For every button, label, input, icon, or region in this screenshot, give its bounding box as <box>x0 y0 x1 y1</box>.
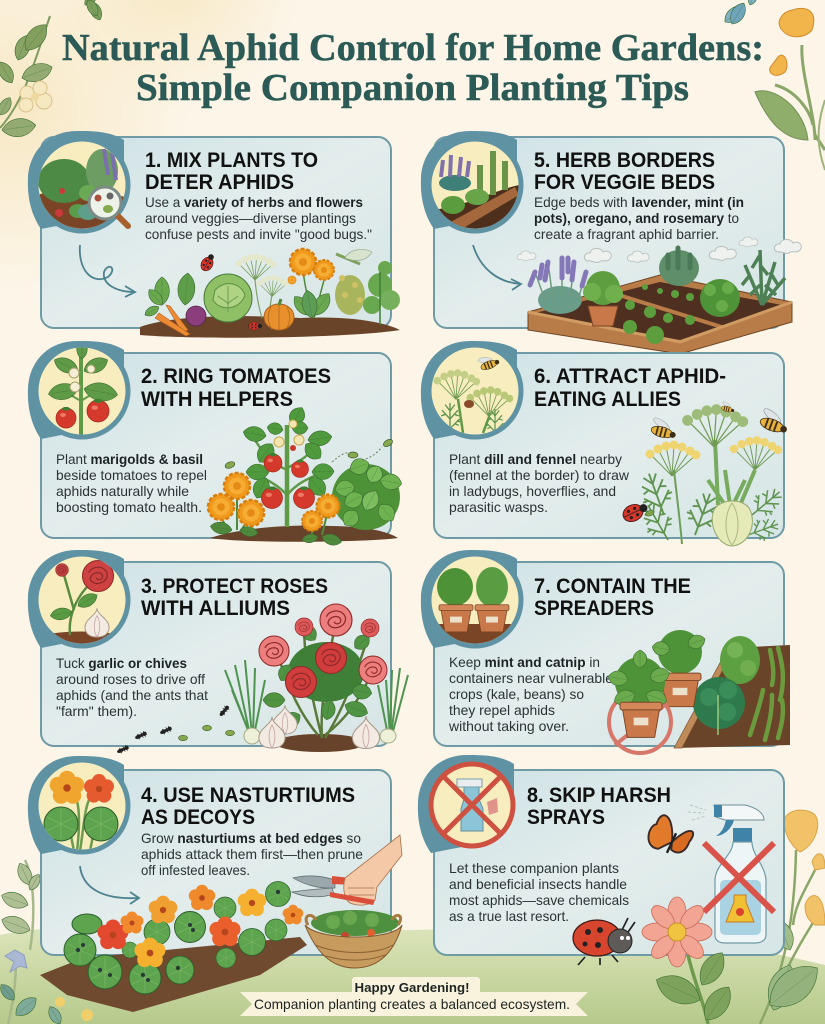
panel 2 badge icon: tomato plant <box>28 339 128 439</box>
aphid clusters <box>76 890 280 982</box>
umbel flower <box>235 253 289 318</box>
panel 8 heading <box>527 784 671 829</box>
panel 2 heading: 2. RING TOMATOES <box>141 365 331 388</box>
ladybug large <box>573 918 635 965</box>
raised bed scene <box>517 237 801 354</box>
panel 6 text: Plant dill and fennel nearby <box>449 451 622 467</box>
panel 5 card <box>434 137 784 328</box>
panel 3 card <box>41 562 391 746</box>
title: Simple Companion Planting Tips <box>136 67 689 109</box>
panel 8 card <box>434 770 784 955</box>
pink flower <box>642 897 738 1024</box>
pumpkin <box>264 299 294 330</box>
ladybug in scene 1 <box>199 252 217 273</box>
panel 3 badge icon: rose and garlic <box>28 550 128 650</box>
panel 6 text <box>449 451 630 515</box>
panel 1 heading: 1. MIX PLANTS TO <box>145 149 318 172</box>
panel 3 text: "farm" them). <box>56 703 137 719</box>
panel 2 text <box>56 451 207 515</box>
aphid leaf <box>644 509 655 517</box>
panel 1 card <box>41 137 391 328</box>
panel 1: mix plants <box>28 131 400 338</box>
rose bush <box>259 604 387 752</box>
nasturtium flowers <box>97 885 303 967</box>
footer banner <box>240 977 588 1016</box>
pot 2 with plant <box>651 630 707 707</box>
panel 7 text: they repel aphids <box>449 702 555 718</box>
panel 7 heading: 7. CONTAIN THE <box>534 575 691 598</box>
panel 7: contain spreaders <box>421 550 790 753</box>
panel 3 text <box>56 655 208 719</box>
panel 7 text: crops (kale, beans) so <box>449 686 584 702</box>
top-right foliage with orange flowers <box>721 0 825 170</box>
ring slash <box>615 705 665 745</box>
umbels <box>646 404 782 476</box>
panel 6 badge icon: dill with bees <box>421 341 521 439</box>
panel 3 heading: WITH ALLIUMS <box>141 597 290 620</box>
panel 1 text: confuse pests and invite "good bugs." <box>145 226 372 242</box>
panel 1 text: Use a variety of herbs and flowers <box>145 194 363 210</box>
panel 8: skip sprays <box>418 755 784 1024</box>
panel 8 text: Let these companion plants <box>449 860 619 876</box>
panel 5 heading: 5. HERB BORDERS <box>534 149 715 172</box>
marigolds <box>208 473 343 547</box>
lettuce <box>720 636 760 684</box>
thyme <box>659 248 699 286</box>
panel 3: roses <box>28 550 408 755</box>
panel 7 heading: SPREADERS <box>534 597 654 620</box>
panel 4 text: aphids attack them first—then prune <box>141 846 363 862</box>
dill fronds <box>634 468 788 547</box>
panel 4 heading: AS DECOYS <box>141 806 255 829</box>
spray bottle with red cross <box>688 805 774 943</box>
panel 4 text <box>141 830 363 878</box>
dill and fennel scene <box>620 400 792 547</box>
panel 5 text: pots), oregano, and rosemary to <box>534 210 739 226</box>
panel 6 text: in ladybugs, hoverflies, and <box>449 483 616 499</box>
panel 7 card <box>434 562 784 746</box>
panel 5: herb borders <box>421 131 801 354</box>
carrots and radish <box>143 272 206 336</box>
panel 4 heading <box>141 784 355 829</box>
panel 3 heading: 3. PROTECT ROSES <box>141 575 328 598</box>
panel 1 text: around veggies—diverse plantings <box>145 210 356 226</box>
chives left <box>225 660 265 744</box>
panel 3 text: aphids (and the ants that <box>56 687 208 703</box>
panel 1 badge icon: garden with magnifier <box>28 131 128 235</box>
panel 4 badge icon: nasturtiums <box>28 756 128 854</box>
rose scene <box>116 604 408 755</box>
panel 2 text: boosting tomato health. <box>56 499 202 515</box>
panel 4: nasturtiums <box>28 756 402 1012</box>
marigolds <box>288 249 335 319</box>
garden scene: mixed plants <box>140 249 400 338</box>
fennel bulb and stems <box>708 440 755 546</box>
garlic bulbs <box>259 705 380 748</box>
panel 2 heading: WITH HELPERS <box>141 388 293 411</box>
panel 6 text: parasitic wasps. <box>449 499 548 515</box>
panel 2 heading <box>141 365 331 411</box>
lavender <box>530 258 586 314</box>
panel 3 heading <box>141 575 328 620</box>
arrow: panel 1 <box>80 245 135 297</box>
panel 2 text: beside tomatoes to repel <box>56 467 207 483</box>
panel 2: tomatoes <box>28 339 403 547</box>
kale <box>693 677 745 735</box>
panel 5 heading: FOR VEGGIE BEDS <box>534 171 715 194</box>
lacewing <box>336 250 372 264</box>
title <box>62 27 764 109</box>
arrow: panel 4 <box>80 866 139 904</box>
panel 6 heading: 6. ATTRACT APHID- <box>534 365 726 388</box>
oregano <box>700 279 740 317</box>
arrow: panel 5 <box>473 245 521 290</box>
scent clouds <box>517 237 801 263</box>
ladybug <box>620 499 650 525</box>
top-left foliage <box>0 0 105 139</box>
pot 1 with plant <box>607 650 671 737</box>
panel 8 heading: SPRAYS <box>527 806 605 829</box>
crop bed <box>674 645 790 748</box>
panel 5 text <box>534 194 744 242</box>
basil <box>332 456 403 530</box>
hand with pruners <box>292 835 402 905</box>
panel 3 text: around roses to drive off <box>56 671 205 687</box>
soil <box>210 526 398 542</box>
bean pods <box>750 648 783 740</box>
panel 8 badge icon: no sprays <box>418 755 514 853</box>
panel 4 heading: 4. USE NASTURTIUMS <box>141 784 355 807</box>
tomato plant <box>242 404 334 527</box>
panel 5 heading <box>534 149 715 194</box>
panel 5 badge icon: herbs in bed <box>421 131 521 231</box>
raised bed <box>528 275 792 354</box>
panel 4 text: off infested leaves. <box>141 862 250 878</box>
panel 1 heading <box>145 149 318 194</box>
soil bed <box>40 937 307 1012</box>
panel 6 card <box>434 353 784 538</box>
panel 8 text: most aphids—save chemicals <box>449 892 629 908</box>
footer banner: Happy Gardening! <box>354 980 470 995</box>
chives right <box>378 668 408 743</box>
flying aphids <box>224 438 394 470</box>
panel 7 text: Keep mint and catnip in <box>449 654 600 670</box>
small bee <box>720 400 736 414</box>
panel 6 heading <box>534 365 726 411</box>
footer banner: Companion planting creates a balanced ecosystem. <box>254 996 570 1012</box>
panel 7 heading <box>534 575 691 620</box>
nasturtium bed scene <box>40 835 402 1012</box>
bottom-left foliage <box>0 860 93 1024</box>
panel 7 text: without taking over. <box>448 718 569 734</box>
tomato scene <box>208 404 403 547</box>
panel 1 text <box>145 194 372 242</box>
wasp <box>757 405 792 436</box>
panel 1 heading: DETER APHIDS <box>145 171 294 194</box>
seedlings <box>623 284 695 344</box>
panel 4 card <box>41 770 391 955</box>
panel 8 heading: 8. SKIP HARSH <box>527 784 671 807</box>
panel 7 text: containers near vulnerable <box>449 670 613 686</box>
bee <box>649 415 679 441</box>
nasturtium leaves <box>64 882 290 994</box>
panel 8 text <box>449 860 629 924</box>
panel 7 badge icon: two pots <box>421 550 521 650</box>
ants and aphids trail <box>116 704 234 755</box>
bottom-right foliage with yellow flowers <box>760 810 825 1024</box>
panel 6 text: (fennel at the border) to draw <box>449 467 630 483</box>
panel 6 heading: EATING ALLIES <box>534 388 681 411</box>
panel 2 text: aphids naturally while <box>56 483 189 499</box>
panel 5 text: create a fragrant aphid barrier. <box>534 226 719 242</box>
title: Natural Aphid Control for Home Gardens: <box>62 27 764 69</box>
panel 2 text: Plant marigolds & basil <box>56 451 203 467</box>
small ladybug on soil <box>249 322 262 330</box>
yellow herb and green plant <box>335 261 400 325</box>
butterfly <box>644 812 696 860</box>
panel 2 card <box>41 353 391 538</box>
mint pot <box>583 271 623 326</box>
panel 5 text: Edge beds with lavender, mint (in <box>534 194 744 210</box>
panel 8 text: as a true last resort. <box>449 908 569 924</box>
panel 4 text: Grow nasturtiums at bed edges so <box>141 830 361 846</box>
panel 6: dill and fennel <box>421 341 792 547</box>
panel 7 text <box>448 654 613 734</box>
no-spread ring <box>609 691 671 753</box>
panel 8 text: and beneficial insects handle <box>449 876 627 892</box>
basket of leaves <box>305 910 402 968</box>
panel 3 text: Tuck garlic or chives <box>56 655 187 671</box>
cabbage <box>204 274 252 322</box>
pots and crop bed scene <box>607 630 790 753</box>
rosemary <box>742 250 785 305</box>
